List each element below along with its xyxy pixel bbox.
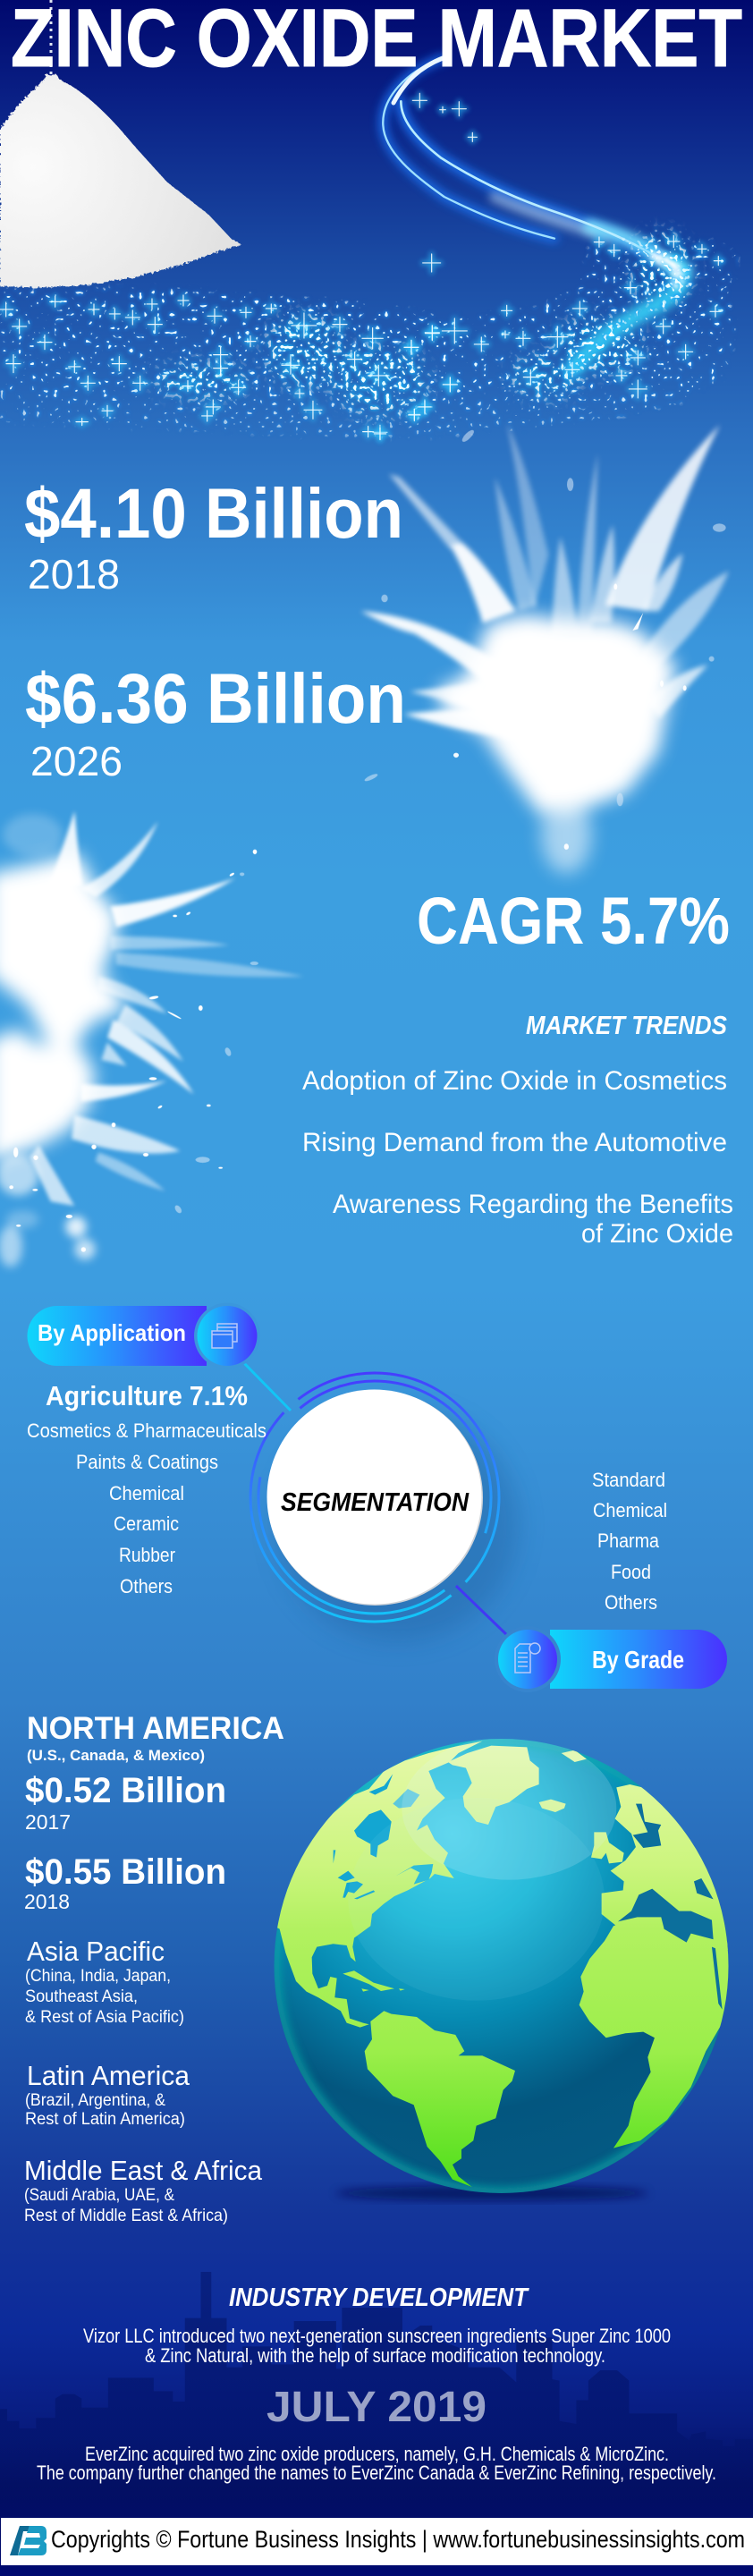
text block: industry development [37,2284,716,2484]
illustration: glowing comet swoosh [383,58,686,367]
text block: Asia Pacific [25,1936,184,2027]
text block: industry development: & Zinc Natural, with the help of surface modification technology. [145,2344,605,2367]
diagram: segmentation hub [200,1323,549,1672]
text block: Latin America [25,2060,190,2129]
text block: Latin America: Rest of Latin America) [25,2110,185,2129]
list: application segments: Agriculture 7.1% [46,1380,248,1411]
list: application segments: Rubber [119,1544,175,1566]
list: application segments [27,1380,267,1597]
list: application segments: Chemical [109,1482,184,1504]
icon: document [515,1643,540,1673]
illustration: city skyline silhouette [0,2272,753,2516]
seas and lakes [618,1804,723,2010]
list: application segments: Paints & Coatings [76,1451,218,1473]
text block: North America: $0.52 Billion [25,1771,226,1810]
icon: stacked windows [212,1324,237,1348]
icon: company logo [10,2526,47,2555]
text block: Middle East and Africa: (Saudi Arabia, UAE, & [24,2186,174,2205]
text block: market trends: Awareness Regarding the Benefits [333,1190,733,1219]
list: grade segments: Others [605,1591,657,1614]
pill: by grade: By Grade [592,1646,684,1674]
text block: North America [24,1711,284,1913]
text block: market trends: Rising Demand from the Automotive [302,1128,727,1157]
stat: 2018 market value [24,473,403,597]
stat: 2026 market value: $6.36 Billion [25,658,406,738]
text block: North America: 2018 [24,1890,70,1913]
list: grade segments: Standard [592,1469,665,1491]
illustration: white powder burst right [360,423,729,874]
illustration: sparkling particle field [0,93,753,456]
diagram: segmentation hub: SEGMENTATION [281,1488,470,1517]
text block: North America: $0.55 Billion [25,1852,226,1892]
text block: Latin America: Latin America [27,2060,190,2091]
stat: 2018 market value: $4.10 Billion [24,473,403,553]
pill: by grade [495,1626,727,1692]
text block: Asia Pacific: (China, India, Japan, [25,1967,171,1986]
illustration: powder pile with falling grains [0,0,241,288]
illustration: white powder burst left [0,811,304,1267]
text block: Asia Pacific: Asia Pacific [27,1936,165,1967]
text block: North America: NORTH AMERICA [27,1711,284,1746]
text block: market trends: of Zinc Oxide [581,1219,733,1249]
list: grade segments [592,1469,667,1614]
text block: Asia Pacific: Southeast Asia, [25,1987,138,2006]
pill: by application [27,1302,260,1368]
text block: Asia Pacific: & Rest of Asia Pacific) [25,2008,184,2027]
list: application segments: Others [120,1575,173,1597]
footer: copyright bar [1,2518,753,2565]
stat: 2018 market value: 2018 [28,551,120,597]
list: grade segments: Chemical [593,1499,667,1521]
text block: North America: (U.S., Canada, & Mexico) [27,1747,205,1764]
list: grade segments: Pharma [597,1530,660,1552]
text block: North America: 2017 [25,1810,71,1834]
text block: market trends: MARKET TRENDS [526,1012,728,1040]
list: application segments: Cosmetics & Pharmaceuticals [27,1419,267,1442]
text block: Latin America: (Brazil, Argentina, & [25,2091,165,2110]
text block: Middle East and Africa [24,2155,263,2225]
pill: by application: By Application [38,1319,186,1346]
stat: 2026 market value: 2026 [30,738,123,784]
text block: industry development: INDUSTRY DEVELOPMENT [229,2284,529,2312]
stat: 2026 market value [25,658,406,784]
text block: Middle East and Africa: Middle East & Africa [24,2155,263,2186]
text block: Middle East and Africa: Rest of Middle East & Africa) [24,2207,228,2225]
list: application segments: Ceramic [114,1513,179,1535]
list: grade segments: Food [611,1561,651,1583]
illustration: globe [274,1735,739,2200]
text block: market trends: Adoption of Zinc Oxide in Cosmetics [302,1066,727,1096]
text block: market trends [302,1012,733,1249]
text block: industry development: JULY 2019 [267,2384,486,2431]
